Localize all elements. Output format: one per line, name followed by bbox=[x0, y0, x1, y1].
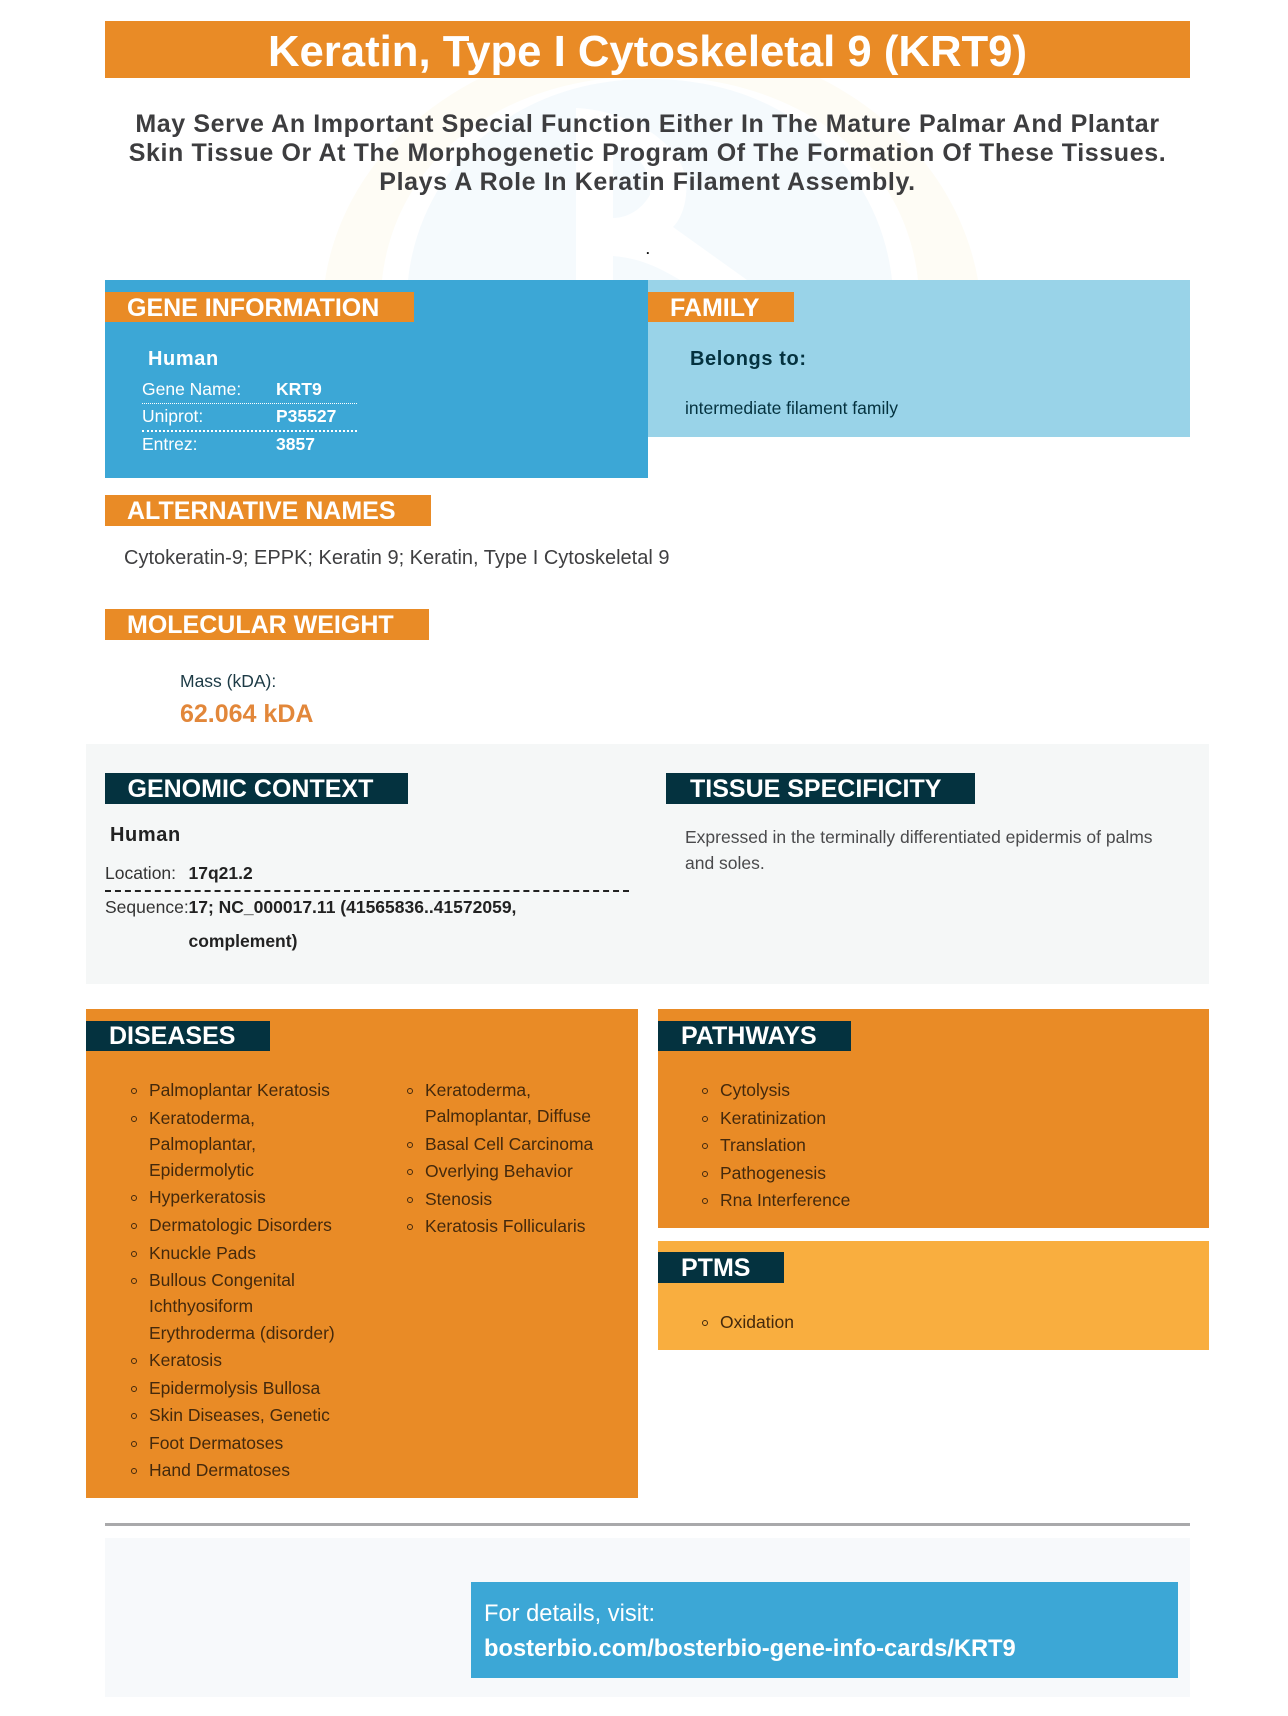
diseases list column 1: Skin Diseases, Genetic bbox=[149, 1404, 330, 1424]
diseases list column 1: Knuckle Pads bbox=[149, 1242, 256, 1262]
diseases list column 2: Stenosis bbox=[425, 1188, 492, 1208]
watermark logo bbox=[325, 78, 978, 280]
panel: footer bbox=[105, 1538, 1190, 1697]
gene table: Gene Name: bbox=[142, 379, 241, 399]
genomic sequence row bbox=[105, 896, 516, 950]
heading: alternative names: ALTERNATIVE NAMES bbox=[127, 497, 396, 525]
diseases list column 1: Hand Dermatoses bbox=[149, 1460, 290, 1480]
heading: molecular weight: MOLECULAR WEIGHT bbox=[127, 611, 394, 639]
genomic sequence row: Sequence: bbox=[105, 896, 189, 916]
diseases list column 1: Ichthyosiform bbox=[149, 1296, 253, 1316]
footer divider bbox=[105, 1523, 1190, 1526]
panel: pathways bbox=[658, 1009, 1209, 1228]
heading: tissue specificity: TISSUE SPECIFICITY bbox=[690, 775, 941, 803]
gene table: 3857 bbox=[276, 434, 315, 454]
description text: May Serve An Important Special Function Either In The Mature Palmar And Plantar bbox=[135, 110, 1160, 138]
panel: gene information bbox=[105, 280, 648, 478]
diseases list column 2: Keratosis Follicularis bbox=[425, 1216, 585, 1236]
panel: ptms bbox=[658, 1241, 1209, 1350]
pathways list bbox=[702, 1080, 850, 1210]
species label: Human bbox=[148, 348, 219, 370]
tissue specificity text: Expressed in the terminally differentiated epidermis of palms bbox=[685, 827, 1153, 847]
heading: ptms bbox=[658, 1252, 784, 1283]
diseases list column 1: Dermatologic Disorders bbox=[149, 1214, 332, 1234]
diseases list column 1 bbox=[131, 1080, 335, 1480]
diseases list column 2: Keratoderma, bbox=[425, 1080, 531, 1100]
diseases list column 1: Epidermolytic bbox=[149, 1160, 254, 1180]
pathways list: Keratinization bbox=[720, 1108, 826, 1128]
callout: details link bbox=[471, 1582, 1178, 1678]
belongs to label: Belongs to: bbox=[690, 348, 807, 370]
gene table: Entrez: bbox=[142, 434, 197, 454]
diseases list column 1: Hyperkeratosis bbox=[149, 1187, 266, 1207]
heading: pathways bbox=[658, 1021, 851, 1051]
gene table: Uniprot: bbox=[142, 406, 203, 426]
description text: Plays A Role In Keratin Filament Assembly. bbox=[379, 168, 916, 196]
genomic location row: 17q21.2 bbox=[188, 862, 253, 882]
heading: genomic context: GENOMIC CONTEXT bbox=[128, 775, 373, 803]
heading: pathways: PATHWAYS bbox=[681, 1022, 817, 1050]
pathways list: Translation bbox=[720, 1134, 806, 1154]
alternative names text: Cytokeratin-9; EPPK; Keratin 9; Keratin, Type I Cytoskeletal 9 bbox=[124, 547, 669, 569]
mass label: Mass (kDA): bbox=[180, 670, 276, 690]
heading: diseases: DISEASES bbox=[109, 1022, 235, 1050]
genomic location row: Location: bbox=[105, 862, 176, 882]
tissue specificity text: and soles. bbox=[685, 853, 765, 873]
gene table: P35527 bbox=[276, 406, 336, 426]
panel: diseases bbox=[86, 1009, 638, 1498]
diseases list column 2: Overlying Behavior bbox=[425, 1160, 573, 1180]
diseases list column 2: Basal Cell Carcinoma bbox=[425, 1134, 593, 1154]
heading: family bbox=[648, 292, 794, 322]
callout url: bosterbio.com/bosterbio-gene-info-cards/KRT9 bbox=[484, 1636, 1016, 1662]
genomic sequence row: complement) bbox=[188, 930, 297, 950]
diseases list column 1: Palmoplantar Keratosis bbox=[149, 1080, 330, 1100]
family value: intermediate filament family bbox=[685, 398, 898, 418]
callout label: For details, visit: bbox=[484, 1601, 655, 1627]
pathways list: Pathogenesis bbox=[720, 1162, 826, 1182]
heading: diseases bbox=[86, 1021, 270, 1051]
mass value: 62.064 kDA bbox=[180, 700, 313, 728]
description text: Skin Tissue Or At The Morphogenetic Program Of The Formation Of These Tissues. bbox=[129, 138, 1166, 166]
panel: genomic context and tissue specificity bbox=[86, 744, 1209, 984]
gene table bbox=[142, 379, 357, 454]
gene table: KRT9 bbox=[276, 379, 322, 399]
tissue specificity text bbox=[685, 827, 1153, 873]
small dot: . bbox=[646, 242, 650, 257]
diseases list column 1: Palmoplantar, bbox=[149, 1134, 256, 1154]
pathways list: Rna Interference bbox=[720, 1190, 850, 1210]
genomic species label: Human bbox=[110, 824, 181, 846]
ptms list: Oxidation bbox=[720, 1312, 794, 1332]
pathways list: Cytolysis bbox=[720, 1080, 790, 1100]
diseases list column 2 bbox=[407, 1080, 594, 1236]
diseases list column 2: Palmoplantar, Diffuse bbox=[425, 1106, 591, 1126]
heading: ptms: PTMS bbox=[681, 1254, 750, 1282]
genomic location row bbox=[105, 862, 629, 892]
genomic sequence row: 17; NC_000017.11 (41565836..41572059, bbox=[188, 896, 516, 916]
diseases list column 1: Erythroderma (disorder) bbox=[149, 1322, 335, 1342]
diseases list column 1: Bullous Congenital bbox=[149, 1270, 295, 1290]
panel: family bbox=[648, 280, 1190, 437]
heading: family: FAMILY bbox=[670, 294, 759, 322]
description text bbox=[129, 110, 1166, 196]
diseases list column 1: Keratoderma, bbox=[149, 1108, 255, 1128]
diseases list column 1: Epidermolysis Bullosa bbox=[149, 1378, 320, 1398]
diseases list column 1: Foot Dermatoses bbox=[149, 1432, 283, 1452]
diseases list column 1: Keratosis bbox=[149, 1350, 222, 1370]
title banner bbox=[105, 21, 1190, 78]
heading: gene information: GENE INFORMATION bbox=[127, 294, 379, 322]
title banner: Keratin, Type I Cytoskeletal 9 (KRT9) bbox=[268, 27, 1027, 76]
